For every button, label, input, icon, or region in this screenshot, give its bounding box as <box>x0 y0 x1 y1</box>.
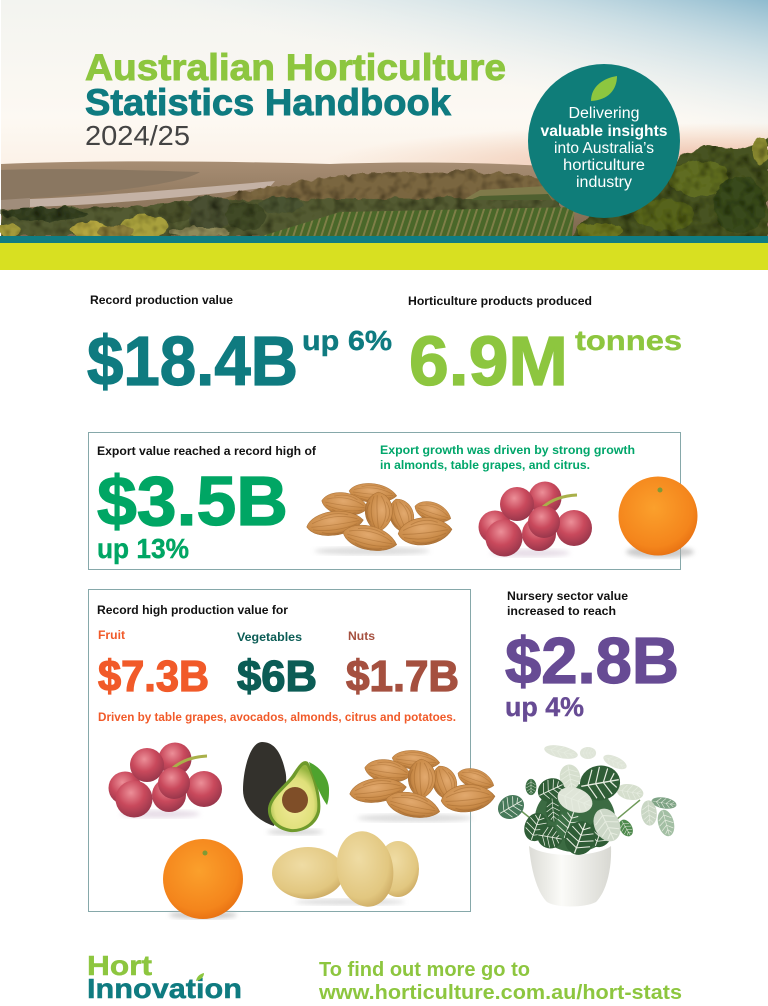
stat: record production value <box>87 295 392 400</box>
text: production drivers: Driven by table grapes, avocados, almonds, citrus and potatoes. <box>98 712 456 724</box>
icon: almonds <box>348 749 497 822</box>
stat: vegetables: $6B <box>237 652 317 701</box>
teal band <box>0 236 768 243</box>
heading: export value: Export value reached a record high of <box>97 444 317 458</box>
icon: potatoes <box>272 827 419 911</box>
logo: Hort Innovation: Hort <box>87 950 152 981</box>
text: export growth drivers <box>380 443 635 472</box>
stat: nursery sector: increased to reach <box>507 604 616 618</box>
stat: nursery sector: $2.8B <box>505 624 679 697</box>
export figure: $3.5B <box>97 462 288 540</box>
call to action <box>318 959 682 1004</box>
logo: Hort Innovation <box>87 950 242 1004</box>
icon: grapes <box>478 482 592 557</box>
panel: export value <box>88 432 698 570</box>
header photo: landscape at sunset <box>0 0 768 240</box>
stat: fruit: $7.3B <box>98 652 209 701</box>
stat: nursery sector: Nursery sector value <box>507 589 628 603</box>
stat: fruit <box>98 630 209 701</box>
lime band <box>0 243 768 270</box>
stat: fruit: Fruit <box>98 630 125 642</box>
icon: avocado <box>243 742 329 835</box>
stat: record production value: up 6% <box>302 325 392 356</box>
title <box>85 47 506 151</box>
stat: horticulture products produced: Horticulture products produced <box>408 296 592 308</box>
stat: horticulture products produced: tonnes <box>575 325 682 356</box>
stat: horticulture products produced <box>408 296 682 400</box>
callout circle: Delivering <box>568 105 640 122</box>
callout circle <box>528 64 680 218</box>
title: 2024/25 <box>85 120 190 151</box>
call to action: www.horticulture.com.au/hort-stats <box>318 982 682 1004</box>
text: export growth drivers: Export growth was driven by strong growth <box>380 443 635 457</box>
icon: almonds <box>305 482 454 555</box>
stat: vegetables: Vegetables <box>237 632 302 644</box>
call to action: To find out more go to <box>319 959 530 981</box>
icon: grapes <box>108 742 222 818</box>
callout circle: horticulture <box>563 157 645 174</box>
logo: Hort Innovation: Innovation <box>87 973 242 1004</box>
stat: nursery sector <box>505 589 679 722</box>
icon: leaf <box>591 76 617 101</box>
icon: potted plant <box>494 743 677 906</box>
icon: orange <box>163 839 243 919</box>
callout circle: valuable insights <box>540 123 668 140</box>
stat: record production value: Record production value <box>90 295 233 307</box>
text: export growth drivers: in almonds, table grapes, and citrus. <box>380 458 590 472</box>
heading: production value: Record high production value for <box>97 603 288 617</box>
export growth: up 13% <box>97 533 189 564</box>
title: Statistics Handbook <box>85 82 451 123</box>
callout circle: industry <box>576 174 632 191</box>
stat: nursery sector: up 4% <box>505 692 584 722</box>
icon: orange <box>618 476 698 558</box>
stat: nuts: $1.7B <box>346 652 459 701</box>
stat: nuts: Nuts <box>348 631 375 643</box>
callout circle: into Australia’s <box>554 140 654 157</box>
stat: nuts <box>346 631 459 701</box>
panel: record high production value <box>88 590 497 919</box>
stat: record production value: $18.4B <box>87 322 298 400</box>
title: Australian Horticulture <box>85 47 506 88</box>
stat: horticulture products produced: 6.9M <box>409 322 568 400</box>
